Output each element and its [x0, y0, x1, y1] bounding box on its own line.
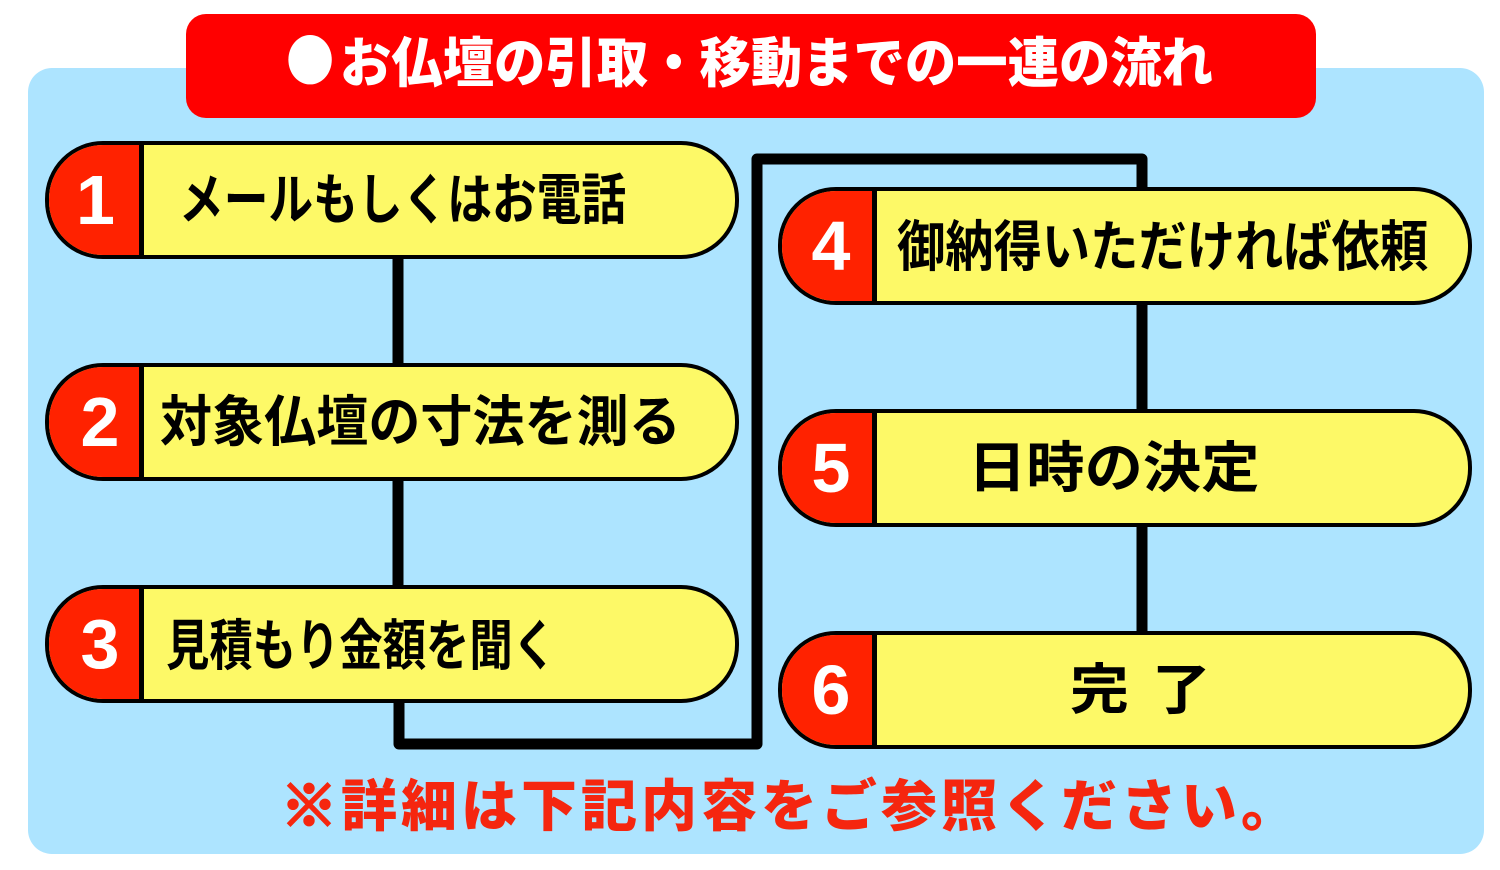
step 1: メールもしくはお電話	[179, 155, 626, 235]
step 5: 日時の決定	[968, 423, 1260, 503]
step 6: 6	[812, 651, 850, 729]
step 4: 御納得いただければ依頼	[897, 202, 1428, 282]
step 1	[45, 141, 739, 259]
step 2: 2	[81, 383, 119, 461]
step 5	[778, 409, 1472, 527]
step 3	[45, 585, 739, 703]
step 4	[778, 187, 1472, 305]
step 4: 4	[812, 207, 850, 285]
step 6	[778, 631, 1472, 749]
step 2: 対象仏壇の寸法を測る	[160, 377, 681, 457]
title banner	[186, 14, 1316, 118]
icon: title bullet: ●	[286, 18, 334, 97]
footnote: ※詳細は下記内容をご参照ください。	[281, 762, 1301, 843]
step 5: 5	[812, 429, 850, 507]
step 2	[45, 363, 739, 481]
step 3: 3	[81, 605, 119, 683]
step 3: 見積もり金額を聞く	[166, 601, 556, 681]
step 6: 完 了	[1070, 645, 1211, 725]
title text: お仏壇の引取・移動までの一連の流れ	[340, 19, 1213, 98]
step 1: 1	[76, 161, 115, 239]
